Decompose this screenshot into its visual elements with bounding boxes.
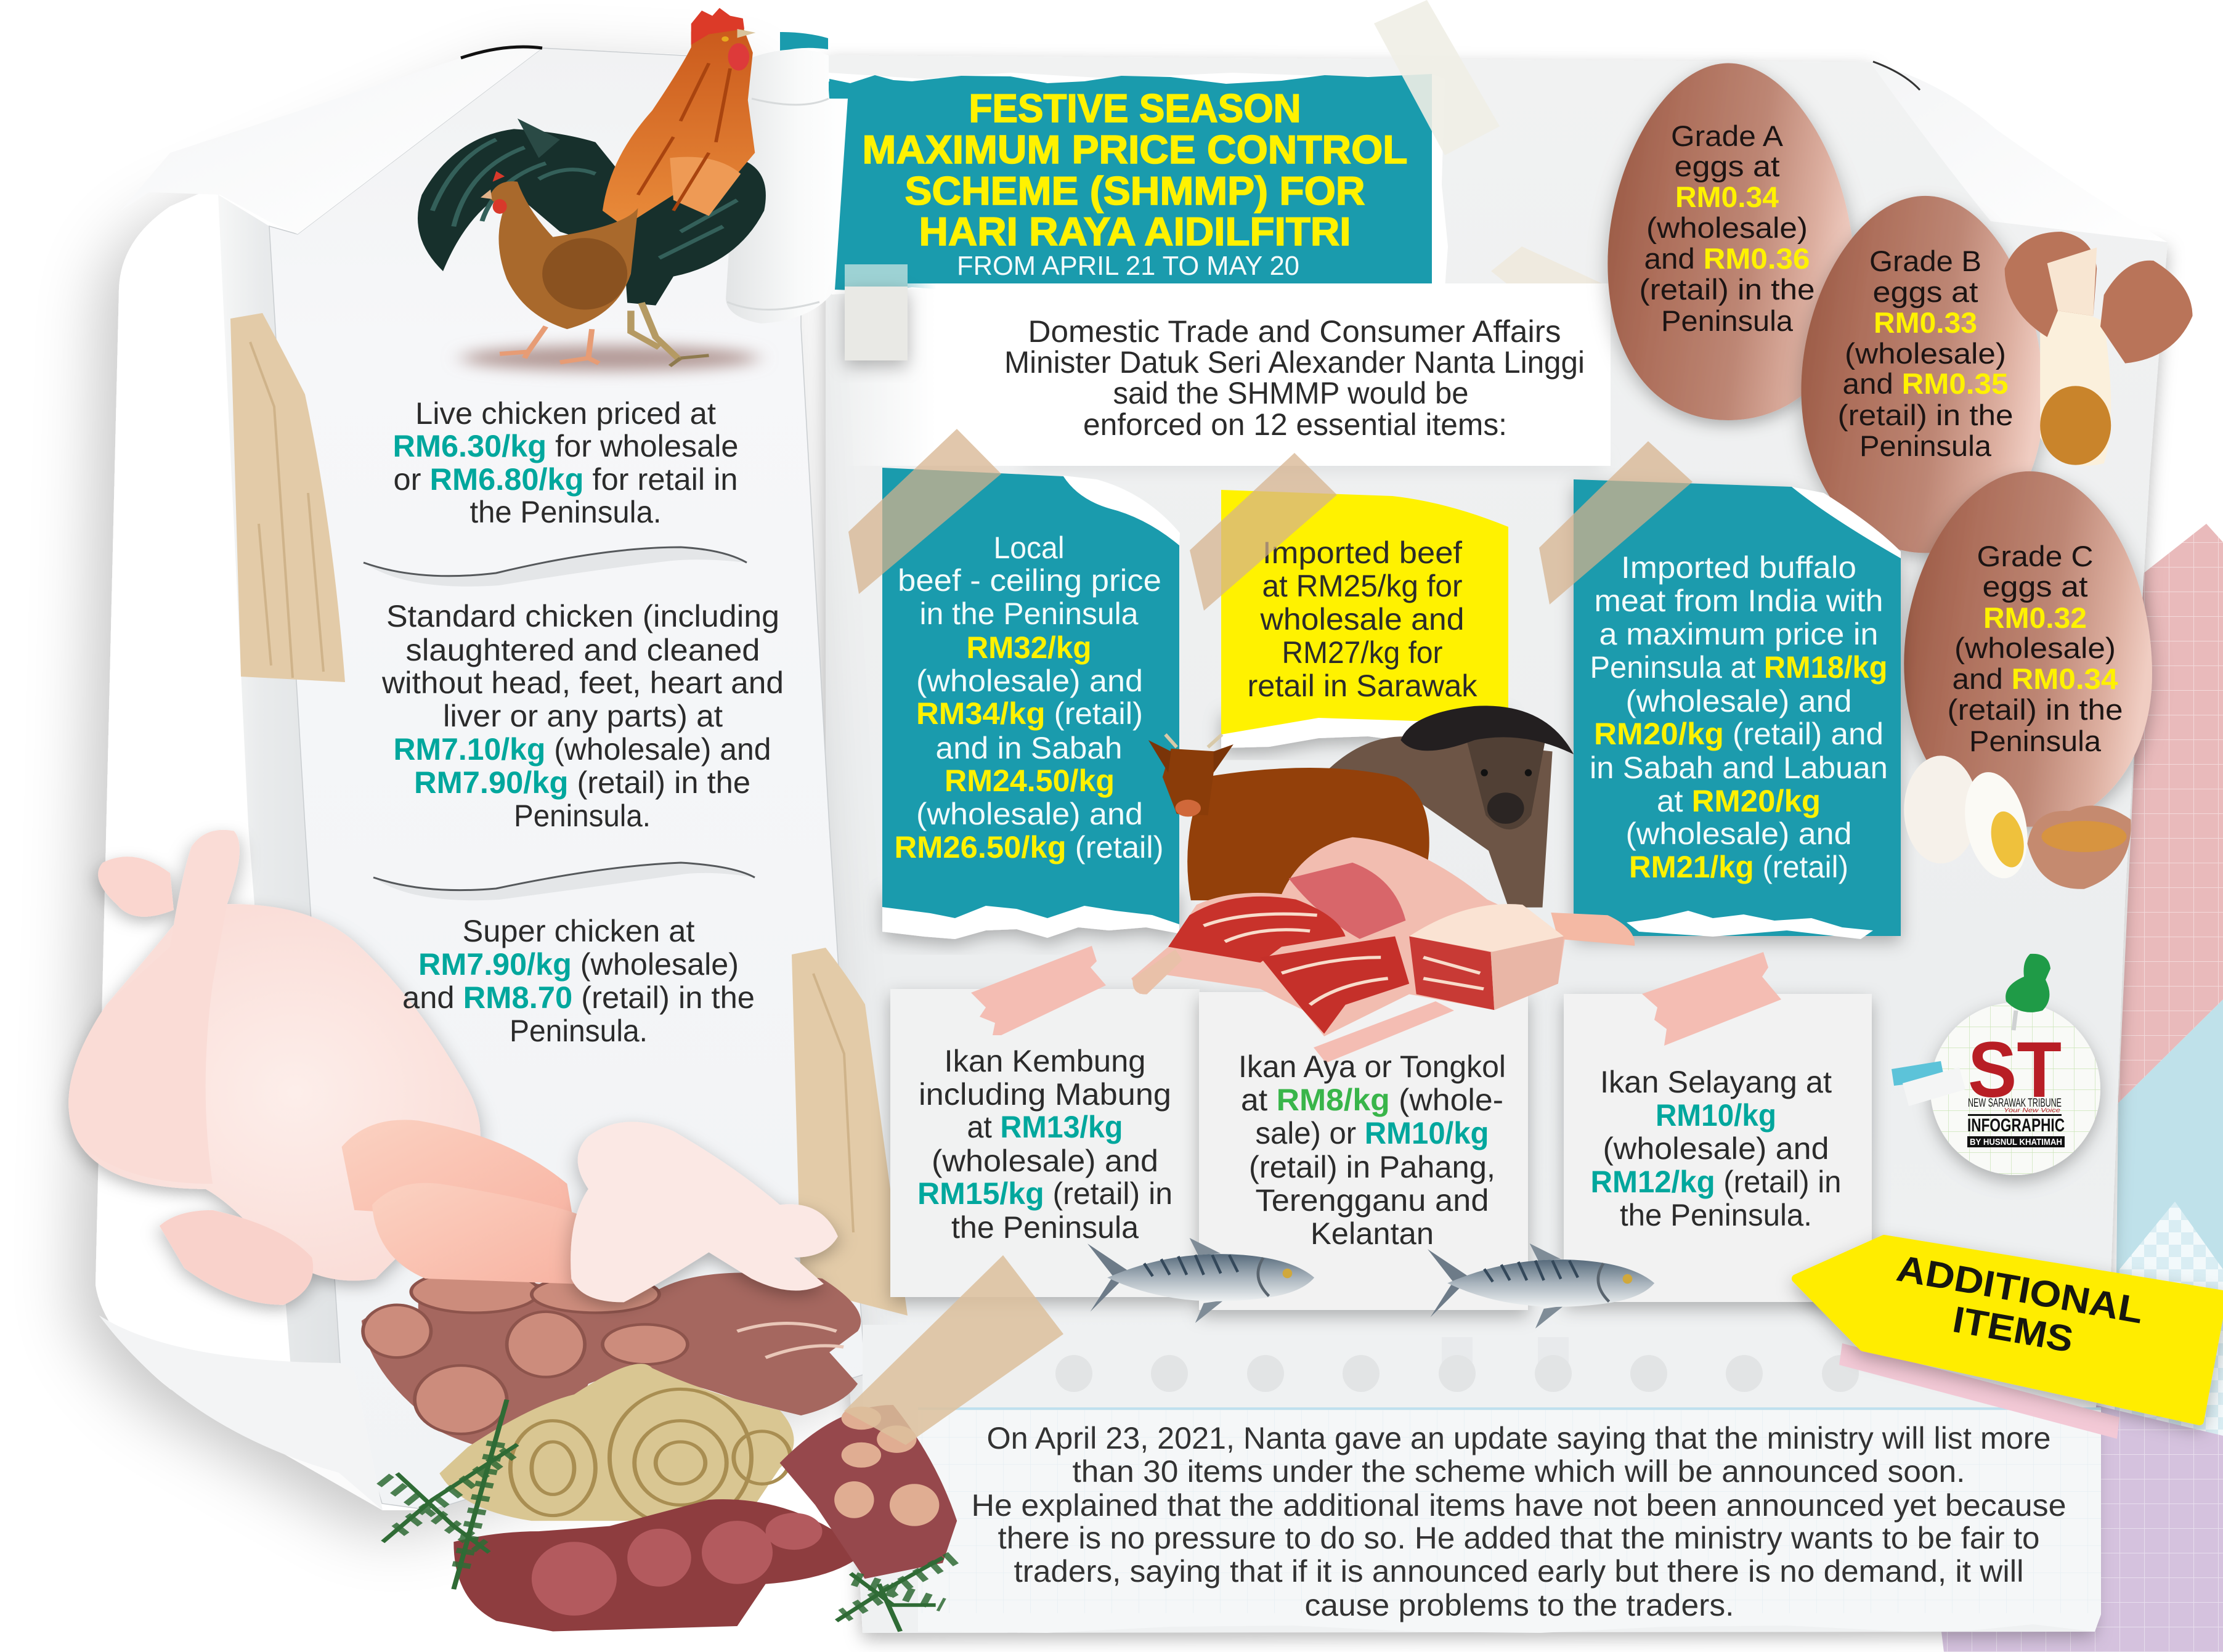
eggs grade C text: (retail) in the: [1947, 693, 2123, 726]
standard chicken text: RM7.90/kg (retail) in the: [414, 765, 750, 800]
imported buffalo text: (wholesale) and: [1625, 816, 1852, 851]
ikan kembung text: including Mabung: [919, 1077, 1171, 1112]
live chicken text: Live chicken priced at: [415, 396, 716, 431]
intro text: said the SHMMP would be: [1113, 376, 1469, 410]
tape on badge: [1892, 1061, 1945, 1086]
title text: [863, 86, 1407, 254]
purple paper: [1941, 1405, 2223, 1652]
logo text: INFOGRAPHIC: [1967, 1115, 2065, 1136]
imported buffalo text: Imported buffalo: [1621, 550, 1856, 585]
super chicken text: [402, 914, 755, 1048]
intro text: Minister Datuk Seri Alexander Nanta Linggi: [1004, 345, 1585, 380]
imported buffalo text: RM20/kg (retail) and: [1594, 717, 1884, 751]
cream tape behind panel: [1491, 246, 1602, 308]
card: imported beef: [1190, 453, 1508, 748]
standard chicken text: liver or any parts) at: [443, 699, 723, 733]
ikan selayang text: Ikan Selayang at: [1600, 1065, 1832, 1099]
eggs grade A text: (retail) in the: [1639, 273, 1815, 306]
bottom text block: there is no pressure to do so. He added that the ministry wants to be fair to: [998, 1521, 2039, 1555]
imported beef text: at RM25/kg for: [1262, 569, 1463, 603]
local beef text: RM34/kg (retail): [916, 696, 1143, 731]
logo text: Your New Voice: [2004, 1107, 2061, 1114]
eggs grade A text: (wholesale): [1646, 211, 1808, 244]
intro text: enforced on 12 essential items:: [1083, 407, 1507, 442]
egg: grade A: [1607, 63, 1855, 420]
live chicken text: RM6.30/kg for wholesale: [393, 429, 738, 463]
ikan aya text: Kelantan: [1311, 1216, 1434, 1251]
ikan kembung text: the Peninsula: [951, 1210, 1139, 1245]
imported buffalo text: in Sabah and Labuan: [1590, 751, 1888, 785]
bottom text block: cause problems to the traders.: [1305, 1588, 1734, 1622]
eggs grade C text: RM0.32: [1983, 601, 2087, 634]
logo text: ST: [1968, 1026, 2062, 1114]
ikan aya text: Ikan Aya or Tongkol: [1238, 1049, 1506, 1084]
shaded band beside the paper: [218, 195, 340, 1368]
teal title banner: [828, 73, 1448, 295]
bottom text block: He explained that the additional items have not been announced yet because: [971, 1488, 2067, 1523]
bottom text block: [971, 1421, 2067, 1622]
eggs grade B text: [1837, 245, 2014, 462]
bottom text block: On April 23, 2021, Nanta gave an update saying that the ministry will list more: [987, 1421, 2050, 1455]
title text: FESTIVE SEASON: [969, 86, 1301, 131]
ikan kembung text: (wholesale) and: [932, 1144, 1158, 1178]
icon: raw chicken: [68, 830, 481, 1305]
standard chicken text: slaughtered and cleaned: [405, 633, 760, 667]
standard chicken text: Standard chicken (including: [386, 599, 779, 633]
inner paper: [269, 48, 865, 1510]
local beef text: Local: [993, 531, 1065, 565]
icon: fish one: [1087, 1238, 1314, 1323]
ikan aya text: sale) or RM10/kg: [1256, 1116, 1489, 1150]
eggs grade C text: Peninsula: [1969, 725, 2102, 757]
pink tape: [971, 946, 1106, 1035]
eggs grade C text: (wholesale): [1954, 632, 2116, 664]
subtitle dates: FROM APRIL 21 TO MAY 20: [957, 251, 1299, 281]
egg: grade B: [1801, 196, 2044, 553]
whole bird: [68, 830, 481, 1305]
imported beef text: wholesale and: [1259, 602, 1464, 637]
bottom corner fold: [99, 1316, 383, 1510]
local beef text: beef - ceiling price: [898, 563, 1161, 598]
ikan selayang text: RM10/kg: [1656, 1098, 1776, 1133]
swoosh divider two: [373, 863, 755, 900]
icon: cow and buffalo: [1148, 706, 1574, 908]
cow: [1148, 734, 1429, 900]
standard chicken text: Peninsula.: [514, 799, 651, 833]
ikan selayang text: RM12/kg (retail) in: [1591, 1165, 1841, 1199]
eggs grade A text: eggs at: [1675, 150, 1779, 182]
imported beef text: RM27/kg for: [1282, 635, 1443, 670]
super chicken text: RM7.90/kg (wholesale): [418, 947, 739, 982]
standard chicken text: without head, feet, heart and: [381, 665, 784, 700]
punched holes: [1055, 1337, 1859, 1392]
super chicken text: Super chicken at: [462, 914, 695, 948]
imported beef text: Imported beef: [1262, 535, 1462, 570]
pink strip under tag: [1839, 1343, 2119, 1439]
icon: chicken cuts on top of offal: [342, 1120, 838, 1302]
tan tape: [1190, 453, 1337, 611]
ikan aya text: Terengganu and: [1256, 1183, 1489, 1218]
ikan selayang text: (wholesale) and: [1603, 1131, 1829, 1166]
ruled grid paper: [918, 1409, 2101, 1633]
tag text: [1887, 1247, 2147, 1372]
eggs grade C text: Grade C: [1977, 540, 2094, 572]
ikan aya text: at RM8/kg (whole-: [1241, 1083, 1503, 1117]
herbs: [383, 1400, 953, 1632]
ikan selayang text: [1591, 1065, 1841, 1232]
ikan kembung text: RM15/kg (retail) in: [917, 1176, 1172, 1211]
second tan tape: [792, 948, 908, 1316]
rooster: [418, 8, 766, 366]
ikan selayang text: the Peninsula.: [1620, 1198, 1812, 1232]
live chicken text: the Peninsula.: [469, 495, 662, 529]
tan tape: [1539, 441, 1693, 604]
local beef text: [895, 531, 1163, 865]
title text: HARI RAYA AIDILFITRI: [919, 209, 1351, 254]
tag text: ADDITIONAL: [1893, 1247, 2147, 1332]
egg: grade C: [1904, 471, 2152, 827]
live chicken text: [393, 396, 738, 529]
imported buffalo text: [1590, 550, 1888, 884]
intro text: Domestic Trade and Consumer Affairs: [1028, 314, 1561, 349]
intro text: [1004, 314, 1585, 442]
icon: fish two: [1428, 1243, 1654, 1329]
imported buffalo text: meat from India with: [1595, 584, 1883, 618]
eggs and text: [1607, 63, 2193, 827]
card: local beef: [848, 429, 1180, 939]
torn bottom edge: [1627, 911, 1873, 939]
left rolled paper column: [96, 47, 865, 1510]
ikan aya text: [1238, 1049, 1506, 1251]
ikan kembung text: [917, 1044, 1172, 1245]
pale tape on banner: [845, 264, 908, 360]
curled roll beside title: [726, 32, 848, 323]
logo text: NEW SARAWAK TRIBUNE: [1968, 1097, 2062, 1110]
top fold flap: [121, 47, 542, 234]
standard chicken text: RM7.10/kg (wholesale) and: [393, 732, 771, 767]
eggs grade A text: Peninsula: [1661, 304, 1794, 337]
pink tape under the meat: [1314, 1001, 1454, 1063]
local beef text: RM26.50/kg (retail): [895, 830, 1163, 865]
imported beef text: retail in Sarawak: [1247, 669, 1478, 703]
dark livers: [453, 1499, 865, 1632]
eggs grade B text: eggs at: [1873, 275, 1978, 308]
eggs grade B text: (wholesale): [1845, 337, 2006, 370]
eggs grade B text: Peninsula: [1859, 429, 1992, 462]
back sheet of paper: [826, 55, 2168, 1633]
icon: chicken offal and herbs: [362, 1271, 957, 1632]
swoosh divider one: [364, 547, 747, 587]
page curl top right: [1870, 62, 2168, 242]
eggs grade B text: (retail) in the: [1837, 399, 2014, 431]
local beef text: in the Peninsula: [919, 596, 1139, 631]
imported beef text: [1247, 535, 1478, 703]
super chicken text: Peninsula.: [510, 1014, 648, 1048]
logo badge: [1892, 954, 2100, 1175]
breast fillets: [342, 1120, 574, 1234]
local beef text: (wholesale) and: [916, 664, 1143, 698]
imported buffalo text: (wholesale) and: [1625, 684, 1852, 718]
buffalo: [1315, 706, 1574, 908]
eggs grade A text: RM0.34: [1675, 181, 1779, 213]
eggs grade A text: Grade A: [1671, 120, 1784, 152]
card: ikan selayang: [1564, 952, 1872, 1302]
card: imported buffalo: [1539, 441, 1901, 939]
eggs grade A text: and RM0.36: [1644, 242, 1810, 275]
liver and gizzard: [362, 1272, 861, 1447]
white intro panel: [844, 283, 1611, 468]
coloured papers on the right edge: [1941, 524, 2223, 1652]
left column price text: [364, 396, 784, 900]
card: ikan aya: [1199, 992, 1528, 1310]
tag text: ITEMS: [1949, 1298, 2076, 1361]
title text: SCHEME (SHMMP) FOR: [904, 168, 1365, 213]
imported buffalo text: RM21/kg (retail): [1629, 850, 1848, 884]
standard chicken text: [381, 599, 784, 833]
icon: green push pin: [2006, 954, 2050, 1030]
notebook paper panel at bottom: [863, 1325, 2101, 1633]
ikan kembung text: Ikan Kembung: [944, 1044, 1146, 1078]
local beef text: and in Sabah: [935, 731, 1123, 765]
light blue paper: [2115, 999, 2223, 1442]
local beef text: (wholesale) and: [916, 797, 1143, 831]
eggs grade C text: eggs at: [1983, 570, 2087, 603]
imported buffalo text: Peninsula at RM18/kg: [1590, 650, 1888, 685]
title text: MAXIMUM PRICE CONTROL: [863, 127, 1407, 172]
icon: raw beef cuts: [1131, 837, 1635, 1036]
eggs grade B text: Grade B: [1869, 245, 1981, 277]
eggs grade B text: and RM0.35: [1842, 367, 2009, 400]
cracked egg: [2005, 232, 2193, 466]
pink grid paper: [2118, 524, 2223, 1103]
tripe: [439, 1364, 794, 1521]
eggs grade C text: and RM0.34: [1952, 662, 2118, 695]
super chicken text: and RM8.70 (retail) in the: [402, 980, 755, 1015]
eggs grade B text: RM0.33: [1874, 306, 1977, 339]
tan tape: [848, 429, 1001, 594]
tan tape on left column: [230, 313, 345, 682]
eggs grade A text: [1639, 120, 1815, 337]
ikan aya text: (retail) in Pahang,: [1249, 1150, 1495, 1184]
roll and bottom curl: [96, 48, 865, 1510]
drumstick: [571, 1121, 838, 1302]
bottom text block: traders, saying that if it is announced early but there is no demand, it will: [1014, 1554, 2023, 1589]
local beef text: RM24.50/kg: [945, 763, 1115, 798]
cream tape top of banner: [1374, 0, 1500, 155]
third tan tape: [844, 1255, 1063, 1445]
local beef text: RM32/kg: [966, 630, 1092, 665]
card: ikan kembung: [890, 946, 1200, 1297]
hen: [481, 171, 638, 364]
bottom text block: than 30 items under the scheme which will be announced soon.: [1072, 1454, 1965, 1489]
imported buffalo text: at RM20/kg: [1657, 784, 1821, 818]
icon: white eggs and broken shell: [1904, 755, 2131, 889]
imported buffalo text: a maximum price in: [1599, 617, 1878, 651]
eggs grade C text: [1947, 540, 2123, 757]
icon: rooster and hen: [418, 8, 766, 371]
logo text: BY HUSNUL KHATIMAH: [1970, 1137, 2062, 1147]
additional items arrow tag: [1796, 1239, 2223, 1439]
pink tape: [1642, 952, 1781, 1046]
ikan kembung text: at RM13/kg: [967, 1110, 1123, 1144]
live chicken text: or RM6.80/kg for retail in: [393, 462, 738, 497]
